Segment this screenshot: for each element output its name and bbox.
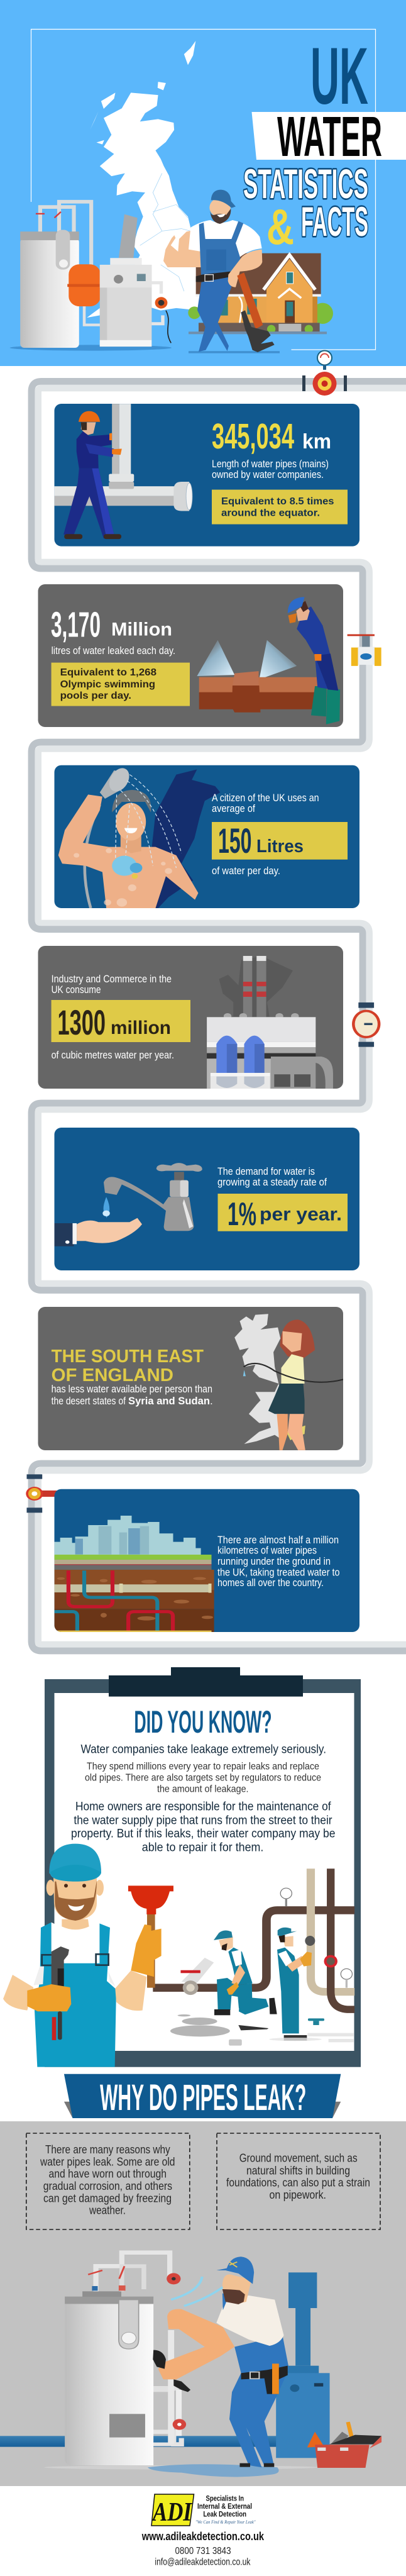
box: many reasons: and have worn out through <box>49 2168 167 2180</box>
text: less water available: has less water available per person than <box>52 1383 212 1395</box>
illustration: pipework <box>153 1868 354 2009</box>
stat: 345,034 km: 345,034 <box>212 416 294 457</box>
logo: ADI: ADI <box>151 2498 192 2527</box>
text: demand for water <box>217 1165 327 1188</box>
box: many reasons: gradual corrosion, and others <box>43 2180 172 2192</box>
callout: 150 litres: Litres <box>256 836 304 857</box>
icon: red valve on left pipe <box>26 1474 57 1513</box>
illustration: factory <box>207 956 333 1089</box>
logo text: Specialists In <box>206 2494 244 2503</box>
text: of water per day: of water per day. <box>212 865 280 877</box>
panel: south east <box>38 1307 343 1450</box>
text: demand for water: The demand for water is <box>217 1165 315 1177</box>
illustration: map and woman <box>234 1314 343 1450</box>
stat: 3,170 Million: 3,170 <box>51 605 101 645</box>
callout: 1300 million: million <box>111 1018 171 1038</box>
illustration: worker with pipe <box>55 404 192 539</box>
heading: did you know: DID YOU KNOW? <box>134 1704 272 1740</box>
icon: pressure gauge and red valve on top pipe <box>302 351 347 396</box>
text: length of water pipes: owned by water companies. <box>212 469 324 480</box>
text: half a million kilometres: homes all over the country. <box>217 1577 324 1589</box>
footer <box>141 2494 265 2567</box>
text: half a million kilometres: There are almost half a million <box>217 1534 339 1546</box>
text: home owners: the water supply pipe that runs from the street to their <box>74 1814 332 1827</box>
text: industry and commerce <box>52 973 172 996</box>
callout: equator <box>212 490 348 525</box>
text: spend millions: old pipes. There are also targets set by regulators to reduce <box>85 1772 321 1784</box>
email: info@adileakdetection.co.uk <box>155 2557 251 2567</box>
panel: citizen use <box>54 765 359 908</box>
box: many reasons: can get damaged by freezing <box>43 2192 172 2205</box>
panel: industry <box>38 946 343 1089</box>
text: less water available <box>52 1383 213 1407</box>
text: half a million kilometres: running under the ground in <box>217 1555 331 1567</box>
box: many reasons <box>26 2133 190 2229</box>
box: many reasons: water pipes leak. Some are old <box>40 2155 175 2168</box>
logo text: Leak Detection <box>203 2509 246 2518</box>
callout: 150 litres <box>212 821 348 860</box>
illustration: city and underground pipes <box>55 1516 214 1632</box>
UK map <box>87 41 200 318</box>
panel: pipe length <box>54 404 359 547</box>
text: less water available: Syria and Sudan <box>128 1395 210 1407</box>
callout: 1% per year <box>217 1194 348 1233</box>
illustration: plumber with plunger <box>3 1844 173 2067</box>
plumber with wrench <box>163 190 280 352</box>
house <box>188 253 333 334</box>
text: litres leaked: litres of water leaked each day. <box>52 645 175 657</box>
panel: why pipes leak grey section <box>0 2121 406 2486</box>
text: half a million kilometres: kilometres of water pipes <box>217 1545 317 1557</box>
illustration: man showering <box>58 766 221 908</box>
phone: 0800 731 3843 <box>175 2546 231 2557</box>
illustration: tap and hand <box>55 1163 202 1246</box>
water heater and boiler <box>10 202 172 351</box>
illustration: workers <box>214 1928 354 2042</box>
hero panel <box>0 0 406 366</box>
text: less water available: . <box>210 1395 213 1407</box>
stat: 3,170 Million: Million <box>111 619 172 640</box>
panel: water leaked <box>38 584 343 727</box>
callout: equator: Equivalent to 8.5 times <box>221 496 334 507</box>
panel: demand <box>54 1128 359 1270</box>
text: half a million kilometres: the UK, taking treated water to <box>217 1567 339 1579</box>
panel: underground pipes <box>54 1489 359 1632</box>
callout: 1300 million: 1300 <box>58 1002 106 1042</box>
text: spend millions <box>85 1761 321 1795</box>
text: spend millions: They spend millions every year to repair leaks and replace <box>87 1761 319 1772</box>
callout: 1300 million <box>52 1000 190 1042</box>
logo text <box>195 2494 256 2525</box>
icon: gauge on right pipe <box>352 1002 380 1047</box>
stat: 345,034 km: km <box>302 430 331 453</box>
title: ampersand: & <box>266 199 294 255</box>
text: citizen of the UK <box>212 792 319 814</box>
text: industry and commerce: UK consume <box>52 984 101 996</box>
illustration: heater, plumber, leak <box>0 2253 381 2477</box>
heading: the south east of england <box>52 1346 204 1385</box>
box: ground movement: Ground movement, such as <box>239 2151 358 2164</box>
text: half a million kilometres <box>217 1534 339 1589</box>
hero frame line <box>31 29 376 350</box>
callout: olympic pools: Olympic swimming <box>60 679 155 690</box>
icon: yellow valve on right pipe <box>348 635 381 666</box>
box: ground movement <box>217 2133 380 2229</box>
logo text: Internal & External <box>197 2502 252 2511</box>
website: www.adileakdetection.co.uk <box>141 2530 265 2543</box>
box: ground movement: natural shifts in building <box>246 2164 350 2177</box>
text: length of water pipes <box>212 458 329 480</box>
callout: olympic pools: Equivalent to 1,268 <box>60 667 156 678</box>
heater body <box>65 2253 223 2465</box>
text: cubic metres: of cubic metres water per year. <box>52 1049 174 1061</box>
callout: equator: around the equator. <box>221 508 320 519</box>
logo text: "We Can Find & Repair Your Leak" <box>195 2520 256 2525</box>
pipeline <box>31 381 406 1651</box>
panel: did you know clipboard <box>3 1667 361 2067</box>
text: home owners <box>71 1801 336 1854</box>
box: many reasons: weather. <box>89 2204 126 2217</box>
toolbox <box>307 2422 381 2468</box>
text: citizen of the UK: A citizen of the UK uses an <box>212 792 319 804</box>
heading: the south east of england: THE SOUTH EAST <box>52 1346 204 1367</box>
title <box>243 31 406 255</box>
text: industry and commerce: Industry and Commerce in the <box>52 973 172 985</box>
text: home owners: Home owners are responsible for the maintenance of <box>75 1801 331 1814</box>
text: citizen of the UK: average of <box>212 802 255 814</box>
callout: 1% per year: per year. <box>260 1204 342 1225</box>
banner: why do pipes leak <box>64 2074 341 2118</box>
text: spend millions: the amount of leakage. <box>157 1784 249 1795</box>
callout: 1% per year: 1% <box>228 1196 256 1233</box>
text: home owners: property. But if this leaks, their water company may be <box>71 1828 336 1840</box>
text: length of water pipes: Length of water pipes (mains) <box>212 458 329 470</box>
clipboard clip <box>109 1667 303 1697</box>
text: home owners: able to repair it for them. <box>142 1841 263 1854</box>
box: ground movement: on pipework. <box>269 2189 326 2201</box>
callout: olympic pools: pools per day. <box>60 691 131 701</box>
plumber fixing leak <box>153 2294 289 2467</box>
illustration: burst copper pipe and worker <box>197 597 340 724</box>
callout: olympic pools <box>52 663 190 706</box>
text: less water available: the desert states of <box>52 1395 126 1407</box>
heading: the south east of england: OF ENGLAND <box>52 1365 173 1385</box>
box: many reasons: There are many reasons why <box>45 2143 170 2156</box>
text: water companies take leakage: Water companies take leakage extremely seriously. <box>80 1743 326 1756</box>
illustration: puddle <box>170 2014 242 2046</box>
callout: 150 litres: 150 <box>218 821 251 860</box>
text: demand for water: growing at a steady rate of <box>217 1176 327 1188</box>
title band: water <box>251 112 406 160</box>
box: ground movement: foundations, can also put a strain <box>226 2177 370 2189</box>
